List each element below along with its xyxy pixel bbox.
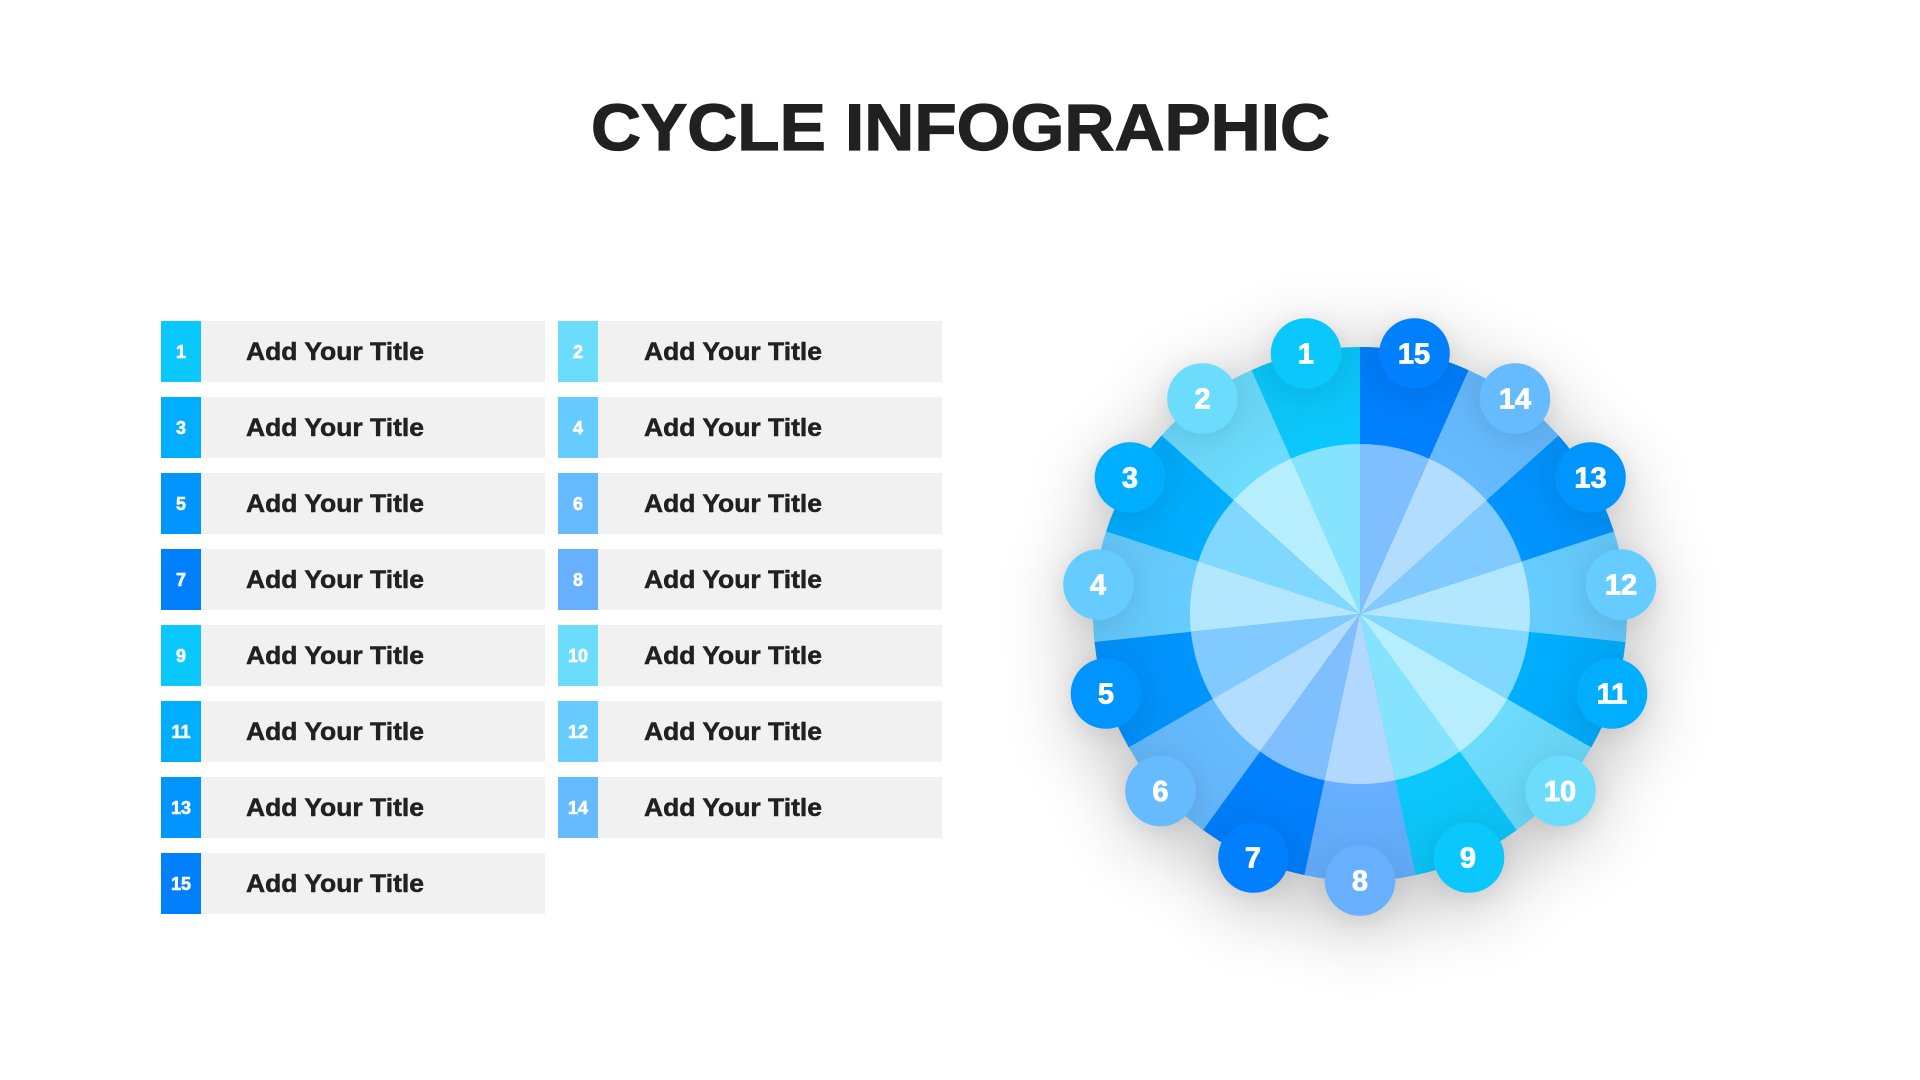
list row 4: Add Your Title [644, 414, 822, 442]
bubble 7 [1218, 822, 1289, 893]
wheel shadow [1064, 336, 1656, 934]
list row 4 [558, 397, 942, 458]
list row 5 [161, 473, 545, 534]
bubble 10 [1525, 756, 1596, 826]
title: CYCLE INFOGRAPHIC [591, 90, 1330, 164]
bubble 4: 4 [1090, 570, 1106, 602]
bubble 8: 8 [1352, 866, 1368, 898]
list: left column [161, 321, 545, 914]
list row 10: 10 [568, 646, 588, 666]
list: right column [558, 321, 942, 838]
bubble 15 [1379, 318, 1450, 389]
list row 12: 12 [568, 722, 588, 742]
list row 7: 7 [176, 570, 186, 590]
bubble shadows [1062, 322, 1657, 921]
wedge 12 [1360, 506, 1637, 642]
list row 11 [161, 701, 545, 762]
list row 10: Add Your Title [644, 642, 822, 670]
bubble 1 [1271, 318, 1341, 389]
list row 3: 3 [176, 418, 186, 438]
list row 2: 2 [573, 342, 583, 362]
wedge 11 [1360, 520, 1646, 748]
list row 12 [558, 701, 942, 762]
list row 12: Add Your Title [644, 718, 822, 746]
wedge 7 [1203, 614, 1448, 894]
list row 1: 1 [176, 342, 186, 362]
bubble 7: 7 [1245, 842, 1261, 874]
list row 8: Add Your Title [644, 566, 822, 594]
list row 8: 8 [573, 570, 583, 590]
bubble 6: 6 [1152, 776, 1169, 808]
bubble 5 [1071, 658, 1141, 729]
bubble 10: 10 [1544, 776, 1576, 808]
bubble 15: 15 [1398, 338, 1430, 370]
wedge 3 [1089, 435, 1360, 695]
list row 15: Add Your Title [246, 870, 424, 898]
wedge 8 [1304, 614, 1466, 898]
wedge 2 [1152, 370, 1360, 658]
list row 11: Add Your Title [246, 718, 424, 746]
bubble 9 [1434, 822, 1504, 893]
bubble 14 [1480, 363, 1550, 434]
wedge 9 [1360, 591, 1522, 875]
list row 9 [161, 625, 545, 686]
list row 11: 11 [171, 722, 191, 742]
list row 7 [161, 549, 545, 610]
list row 9: 9 [176, 646, 186, 666]
bubble 2: 2 [1194, 384, 1211, 416]
list row 14: 14 [568, 798, 588, 818]
list row 3 [161, 397, 545, 458]
list row 5: 5 [176, 494, 186, 514]
bubble 1: 1 [1298, 338, 1314, 370]
list row 1 [161, 321, 545, 382]
bubble 11 [1577, 658, 1647, 729]
cycle wheel [1062, 318, 1657, 934]
list row 15: 15 [171, 874, 191, 894]
wedge 6 [1129, 614, 1414, 842]
bubble 3 [1095, 442, 1165, 513]
bubble 13 [1555, 442, 1626, 513]
bubble 11: 11 [1597, 678, 1627, 710]
list row 4: 4 [573, 418, 583, 438]
wedge 14 [1287, 355, 1558, 614]
bubble 14: 14 [1499, 384, 1531, 416]
wedge 13 [1326, 428, 1614, 614]
list row 13: 13 [171, 798, 191, 818]
list row 6: Add Your Title [644, 490, 822, 518]
list row 8 [558, 549, 942, 610]
list row 3: Add Your Title [246, 414, 424, 442]
wedge 15 [1261, 326, 1469, 614]
bubble 2 [1167, 363, 1238, 434]
wedge 5 [1094, 614, 1371, 750]
wedge 1 [1251, 347, 1360, 614]
list row 6: 6 [573, 494, 583, 514]
list row 13: Add Your Title [246, 794, 424, 822]
bubble 8 [1325, 845, 1395, 916]
wedge 4 [1073, 531, 1360, 717]
bubble 6 [1125, 756, 1196, 826]
list row 2: Add Your Title [644, 338, 822, 366]
wedge 10 [1360, 550, 1605, 830]
list row 6 [558, 473, 942, 534]
list row 15 [161, 853, 545, 914]
list row 2 [558, 321, 942, 382]
bubble 12: 12 [1605, 570, 1637, 602]
bubble 13: 13 [1574, 462, 1607, 494]
bubble 5: 5 [1098, 678, 1114, 710]
list row 10 [558, 625, 942, 686]
bubble 4 [1063, 549, 1134, 620]
list row 5: Add Your Title [246, 490, 424, 518]
list row 1: Add Your Title [246, 338, 424, 366]
list row 14 [558, 777, 942, 838]
bubble 9: 9 [1460, 842, 1476, 874]
list row 7: Add Your Title [246, 566, 424, 594]
bubble 12 [1586, 549, 1656, 620]
bubble 3: 3 [1122, 462, 1138, 494]
list row 14: Add Your Title [644, 794, 822, 822]
list row 13 [161, 777, 545, 838]
list row 9: Add Your Title [246, 642, 424, 670]
